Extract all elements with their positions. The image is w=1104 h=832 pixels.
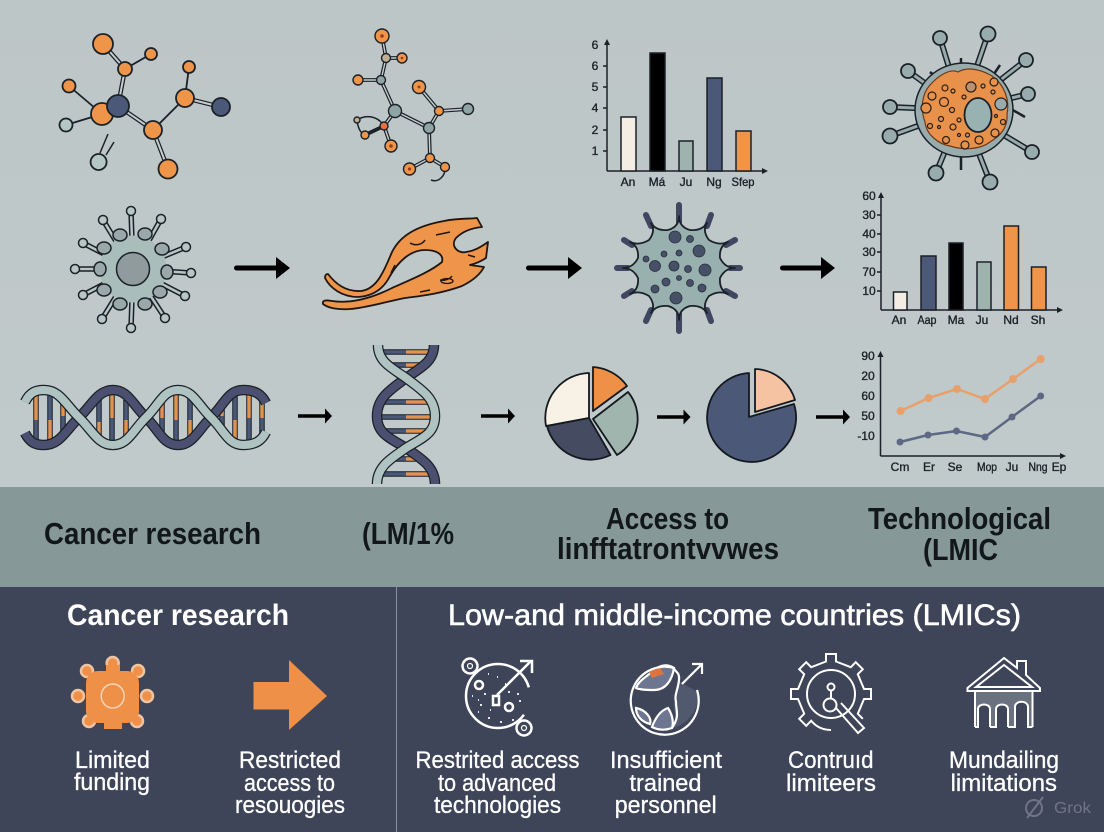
bar chart: middle: 70	[862, 265, 876, 279]
label: advanced technologies: technologies	[434, 792, 561, 819]
bar chart: middle: Aap	[918, 313, 937, 327]
bar chart: top: Sfep	[732, 175, 755, 189]
icon: house	[968, 658, 1040, 727]
label: restricted access: access to	[244, 770, 335, 797]
arrow: row three fourth	[816, 410, 850, 424]
panel: label band: Cancer research	[44, 516, 261, 551]
heading: cancer research: Cancer research	[67, 599, 289, 632]
label: limited funding: funding	[74, 769, 150, 796]
icon: orange elongated cell	[323, 218, 488, 309]
label: restricted access: Restricted	[239, 747, 341, 774]
label: mundailing limitations: Mundailing	[949, 747, 1059, 774]
panel: label band: (LMIC	[923, 532, 998, 567]
bar chart: top: 6	[592, 38, 599, 52]
label: limited funding: Limited	[75, 747, 150, 774]
label: mundailing limitations	[949, 747, 1059, 797]
bar chart: middle: 60	[862, 189, 876, 203]
icon: horizontal DNA helix	[25, 390, 266, 445]
label: limited funding	[74, 747, 150, 796]
bar chart: middle: Sh	[1031, 313, 1045, 327]
line chart: 50	[861, 409, 875, 423]
line chart: 60	[861, 389, 875, 403]
watermark: Grok	[1026, 797, 1092, 818]
line chart: -10	[857, 429, 875, 443]
bar chart: middle: Ma	[948, 313, 965, 327]
line chart: 90	[861, 349, 875, 363]
label: advanced technologies: to advanced	[438, 770, 556, 797]
bar chart: top: Ng	[706, 175, 722, 189]
icon: green cell with dots	[617, 205, 740, 331]
bar chart: top	[592, 38, 768, 189]
icon: gear and wrench	[791, 654, 871, 733]
line chart: Mop	[977, 460, 997, 474]
panel: molecule one	[60, 34, 230, 178]
label: trained personnel: Insufficient	[610, 747, 722, 774]
line chart: Er	[923, 460, 935, 474]
label: restricted access: resouogies	[235, 792, 345, 819]
arrow: row two first	[234, 257, 290, 279]
bar chart: middle: An	[892, 313, 906, 327]
label: control limiteers: limiteers	[786, 770, 876, 797]
panel: label band: Access to	[606, 501, 729, 536]
bar chart: middle	[862, 189, 1063, 327]
icon: orange cancer cell	[882, 26, 1039, 190]
label: advanced technologies: Restrited access	[416, 747, 580, 774]
watermark: Grok: Grok	[1054, 800, 1092, 817]
bar chart: middle: Nd	[1003, 313, 1019, 327]
bar chart: top: 1	[592, 144, 599, 158]
panel: label band: (LM/1%	[362, 516, 454, 551]
line chart: Nng	[1028, 460, 1048, 474]
arrow: row three third	[657, 410, 690, 424]
arrow: row three second	[481, 408, 515, 424]
bar chart: middle: 30	[862, 208, 876, 222]
panel: label band: Technological	[868, 501, 1051, 536]
icon: advanced technologies	[462, 658, 532, 736]
icon: vertical DNA helix	[377, 345, 435, 484]
label: control limiteers: Contruıd	[788, 747, 874, 774]
line chart: 20	[861, 369, 875, 383]
icon: limited funding	[72, 657, 153, 729]
label: control limiteers	[786, 747, 876, 797]
panel: label band	[0, 487, 1104, 587]
line chart: Ep	[1052, 460, 1067, 474]
line chart: Se	[948, 460, 963, 474]
bar chart: top: Ju	[680, 175, 692, 189]
bar chart: top: An	[621, 175, 635, 189]
label: trained personnel: personnel	[615, 792, 717, 819]
bar chart: middle: Ju	[976, 313, 988, 327]
bar chart: top: 6	[592, 59, 599, 73]
icon: orange arrow	[254, 660, 327, 730]
line chart: Cm	[891, 460, 909, 474]
pie chart: navy and peach	[707, 369, 796, 462]
bar chart: top: 4	[592, 101, 599, 115]
icon: spiked cell	[70, 206, 196, 332]
panel: label band: linfftatrontvvwes	[557, 531, 779, 566]
label: trained personnel	[610, 747, 722, 819]
panel: molecule two	[353, 29, 474, 181]
bar chart: top: Má	[649, 175, 666, 189]
bar chart: top: 5	[592, 80, 599, 94]
icon: trained personnel	[631, 664, 702, 735]
label: mundailing limitations: limitations	[951, 770, 1057, 797]
arrow: row two third	[780, 257, 835, 279]
arrow: row two second	[526, 257, 582, 279]
label: trained personnel: trained	[630, 770, 702, 797]
line chart	[857, 349, 1067, 474]
bar chart: top: 2	[592, 123, 599, 137]
panel: dark footer	[0, 587, 1104, 832]
arrow: row three first	[298, 408, 332, 424]
line chart: Ju	[1006, 460, 1018, 474]
label: advanced technologies	[416, 747, 580, 819]
bar chart: middle: 40	[862, 227, 876, 241]
bar chart: middle: 30	[862, 245, 876, 259]
label: restricted access	[235, 747, 345, 819]
bar chart: middle: 10	[862, 284, 876, 298]
heading: LMICs: Low-and middle-income countries (LMICs)	[448, 599, 1021, 632]
pie chart: segmented	[545, 367, 638, 460]
